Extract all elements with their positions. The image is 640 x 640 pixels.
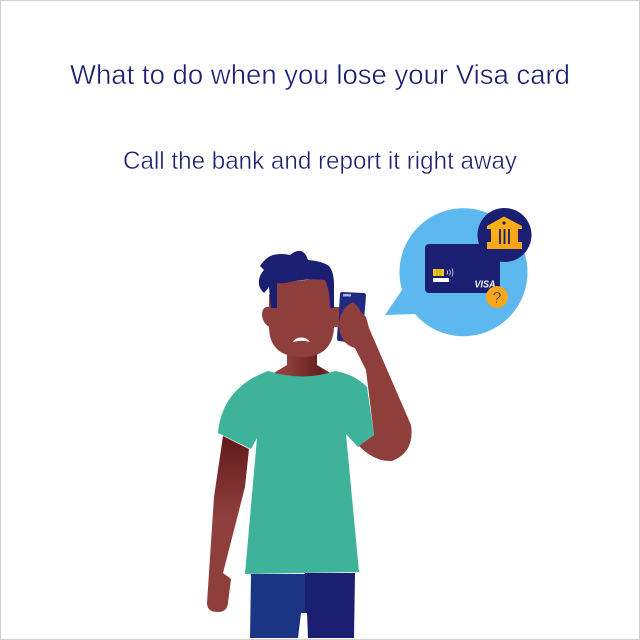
subtitle: Call the bank and report it right away: [123, 147, 517, 175]
face: [269, 278, 334, 357]
mouth: [293, 338, 310, 342]
icon: Visa card: [425, 244, 500, 293]
icon: question mark: [486, 286, 508, 308]
phone: [337, 292, 366, 343]
t-shirt: [218, 371, 374, 574]
ears: [262, 307, 339, 328]
trousers: [250, 573, 355, 638]
right arm and hand: [339, 302, 412, 461]
title: What to do when you lose your Visa card: [70, 59, 570, 90]
icon: bank: [478, 208, 532, 262]
neck: [272, 352, 332, 379]
speech bubble: [385, 208, 532, 336]
hair: [259, 251, 334, 308]
icon: Visa card: VISA: [474, 280, 496, 290]
icon: question mark: ?: [493, 290, 502, 307]
person: [207, 251, 412, 638]
left arm: [207, 436, 249, 612]
